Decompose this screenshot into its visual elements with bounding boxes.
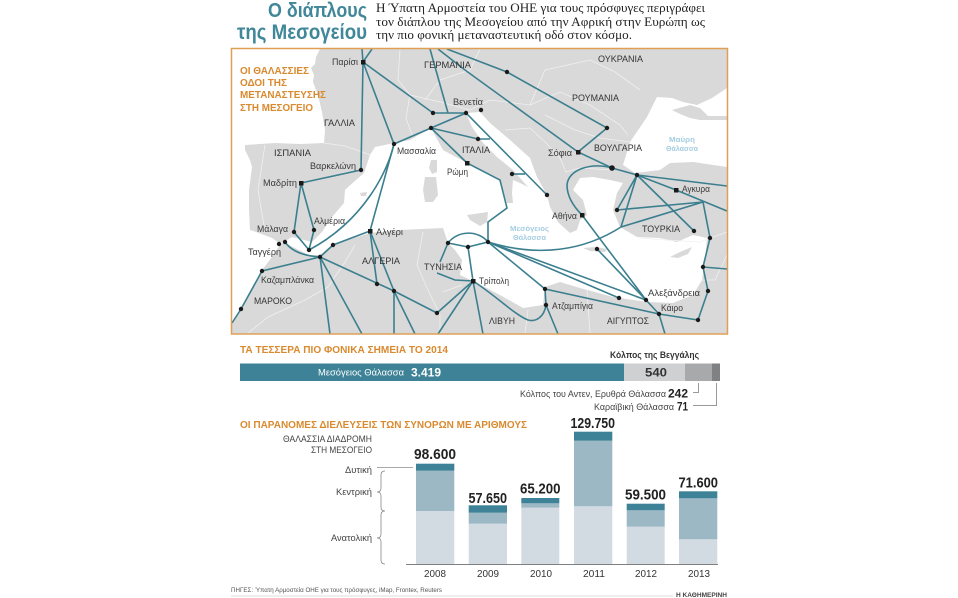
map labels: ΙΣΠΑΝΙΑ (274, 148, 311, 158)
map labels: Βενετία (453, 97, 483, 108)
map heading: ΣΤΗ ΜΕΣΟΓΕΙΟ (240, 103, 313, 114)
bar 2010 (520, 482, 560, 580)
map labels: Ρώμη (447, 167, 468, 178)
chart: border crossings by year (283, 416, 718, 580)
chart: deaths stacked bar (240, 350, 720, 414)
map labels: Αγκυρα (682, 184, 710, 195)
bar 2011 (570, 416, 615, 580)
bar 2009 (468, 491, 507, 580)
intro text (376, 1, 706, 42)
map labels: ΟΥΚΡΑΝΙΑ (598, 54, 643, 64)
map heading: ΜΕΤΑΝΑΣΤΕΥΣΗΣ (240, 90, 326, 101)
panel: migration routes map (232, 48, 728, 334)
bar 2013 (678, 476, 718, 580)
legend (283, 434, 413, 564)
chart: deaths stacked bar: 71 (677, 402, 689, 414)
bar 2011: 129.750 (570, 416, 615, 432)
intro text: την πιο φονική μεταναστευτική οδό στον κόσμο. (376, 28, 632, 42)
map labels: ΒΟΥΛΓΑΡΙΑ (594, 143, 642, 153)
Atlantic sea (232, 49, 325, 322)
map labels: Μάλαγα (257, 224, 288, 235)
map labels: Τρίπολη (479, 276, 509, 287)
title: Ο διάπλους (268, 0, 367, 22)
map heading (240, 66, 326, 114)
route nodes (239, 60, 712, 322)
title: της Μεσογείου (237, 21, 367, 44)
legend: Δυτική (345, 465, 372, 475)
bar 2012: 2012 (635, 568, 657, 580)
country borders (248, 49, 727, 333)
map labels: Μεσόγειος (510, 224, 549, 233)
legend: ΘΑΛΑΣΣΙΑ ΔΙΑΔΡΟΜΗ (283, 434, 372, 444)
map heading: ΟΔΟΙ ΤΗΣ (240, 78, 287, 89)
bar 2012 (625, 488, 666, 580)
chart: deaths stacked bar: Καραϊβική Θάλασσα (594, 402, 674, 413)
map labels: Ταγγέρη (248, 247, 281, 258)
map labels: Ατζαμπίγια (552, 301, 593, 312)
map labels: ΑΛΓΕΡΙΑ (362, 256, 400, 266)
map labels (248, 54, 710, 326)
bar 2012: 59.500 (625, 488, 666, 504)
bar 2013: 71.600 (678, 476, 718, 492)
heading: deadliest points: ΤΑ ΤΕΣΣΕΡΑ ΠΙΟ ΦΟΝΙΚΑ ΣΗΜΕΙΑ ΤΟ 2014 (240, 345, 448, 356)
bar 2008: 2008 (424, 568, 446, 580)
map labels: Αλγέρι (376, 227, 403, 238)
legend: Κεντρική (336, 487, 372, 497)
title (237, 0, 367, 44)
bar 2013: 2013 (688, 568, 710, 580)
bar 2008: 98.600 (414, 447, 456, 463)
legend: ΣΤΗ ΜΕΣΟΓΕΙΟ (311, 445, 372, 455)
chart: deaths stacked bar: Κόλπος της Βεγγάλης (610, 350, 699, 361)
land base (232, 49, 727, 334)
map labels: Κάιρο (661, 303, 683, 314)
bar 2008 (414, 447, 456, 580)
chart: deaths stacked bar: 242 (668, 388, 688, 400)
routes (232, 49, 727, 334)
map labels: Θάλασσα (666, 144, 698, 153)
bar 2009: 2009 (477, 568, 499, 580)
map labels: Καζαμπλάνκα (261, 275, 314, 286)
source note: ΠΗΓΕΣ: Ύπατη Αρμοστεία ΟΗΕ για τους πρόσφυγες, iMap, Frontex, Reuters (231, 586, 443, 594)
bar 2010: 2010 (530, 568, 552, 580)
map frame (232, 48, 728, 334)
map labels: ΡΟΥΜΑΝΙΑ (572, 93, 619, 103)
bar 2009: 57.650 (468, 491, 507, 507)
map labels: ΤΟΥΡΚΙΑ (642, 224, 680, 234)
map labels: ΓΑΛΛΙΑ (324, 118, 355, 128)
map labels: ΓΕΡΜΑΝΙΑ (424, 60, 471, 70)
Black Sea (623, 88, 727, 173)
map labels: ΛΙΒΥΗ (489, 316, 515, 326)
map labels: ΤΥΝΗΣΙΑ (424, 262, 462, 272)
islands (360, 105, 727, 258)
chart: deaths stacked bar: 540 (645, 368, 667, 380)
heading: illegal crossings: ΟΙ ΠΑΡΑΝΟΜΕΣ ΔΙΕΛΕΥΣΕΙΣ ΤΩΝ ΣΥΝΟΡΩΝ ΜΕ ΑΡΙΘΜΟΥΣ (240, 420, 527, 431)
bar 2010: 65.200 (520, 482, 560, 498)
map labels: ΜΑΡΟΚΟ (254, 296, 292, 306)
map labels: Αλεξάνδρεια (648, 288, 701, 299)
map labels: Αθήνα (552, 211, 577, 222)
legend: Ανατολική (331, 533, 372, 543)
chart: deaths stacked bar: Μεσόγειος Θάλασσα (318, 368, 404, 378)
chart: deaths stacked bar: 3.419 (411, 368, 441, 380)
map labels: Αλμέρια (314, 216, 345, 227)
map labels: Βαρκελώνη (310, 161, 356, 172)
chart: deaths stacked bar: Κόλπος του Αντεν, Ερυθρά Θάλασσα (520, 389, 666, 400)
map labels: Μαδρίτη (263, 178, 297, 189)
map labels: Σόφια (548, 148, 572, 159)
map labels: Θάλασσα (513, 233, 546, 242)
map heading: ΟΙ ΘΑΛΑΣΣΙΕΣ (240, 66, 309, 77)
map labels: Παρίσι (332, 57, 358, 68)
map labels: Μαύρη (669, 135, 695, 144)
intro text: τον διάπλου της Μεσογείου από την Αφρική στην Ευρώπη ως (376, 15, 705, 29)
map labels: Μασσαλία (397, 146, 436, 157)
bar 2011: 2011 (583, 568, 605, 580)
Mediterranean sea (284, 112, 707, 308)
intro text: Η Ύπατη Αρμοστεία του ΟΗΕ για τους πρόσφυγες περιγράφει (376, 1, 706, 15)
map labels: ΙΤΑΛΙΑ (462, 145, 490, 155)
map labels: ΑΙΓΥΠΤΟΣ (607, 316, 649, 326)
